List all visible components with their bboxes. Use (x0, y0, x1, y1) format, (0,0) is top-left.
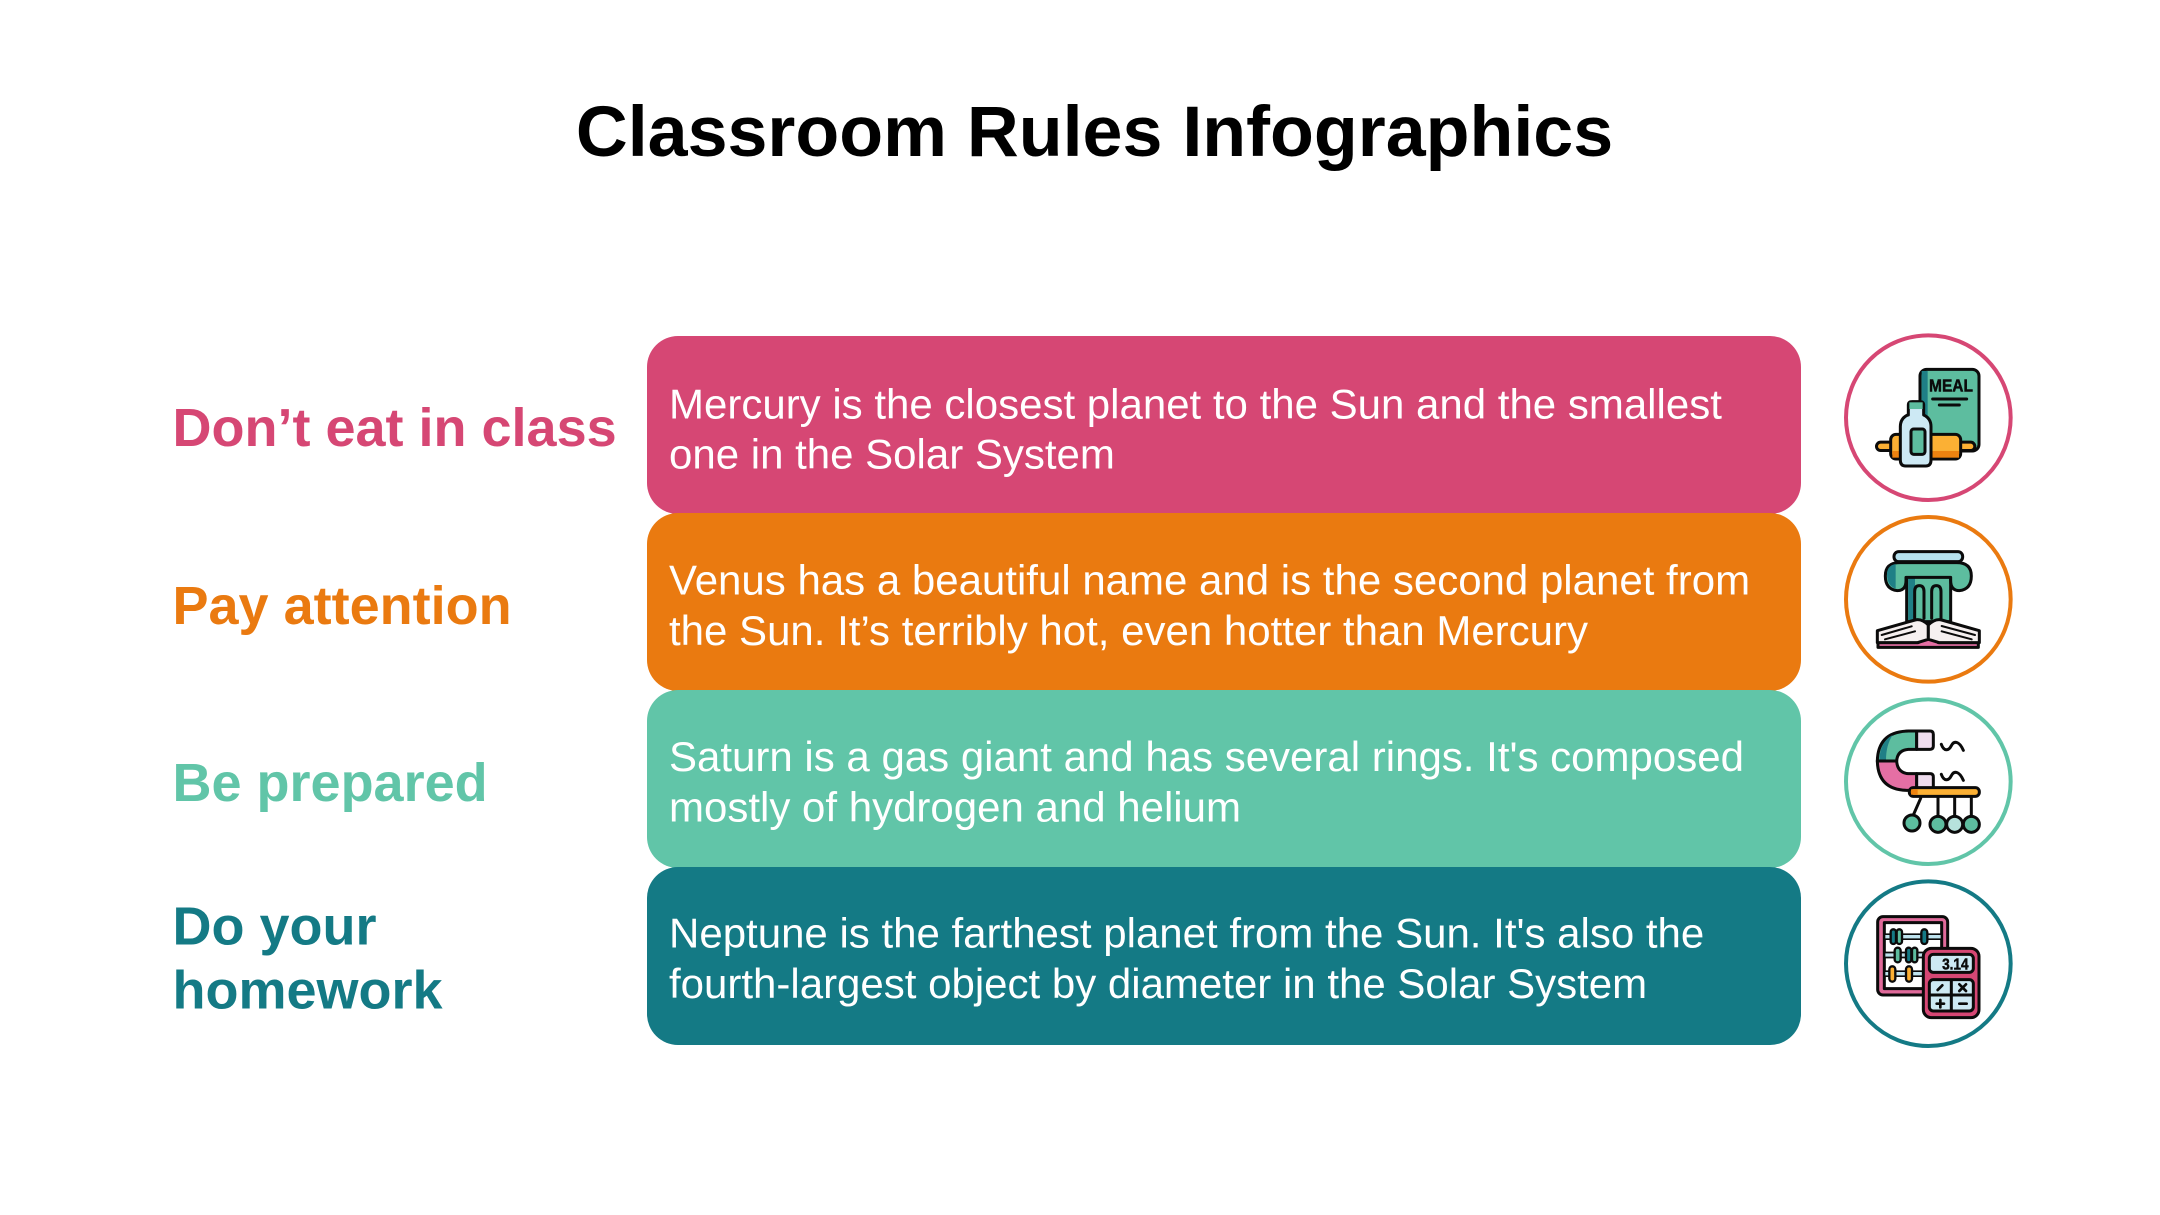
panel: Mercury (647, 336, 1801, 514)
panel: Neptune: Neptune is the farthest planet from the Sun. It's also the (669, 910, 1704, 956)
heading: Be prepared: Be prepared (172, 753, 488, 813)
icon: magnet and pendulums (1846, 699, 2011, 864)
heading: Pay attention: Pay attention (172, 576, 512, 636)
panel: Mercury: one in the Solar System (669, 430, 1115, 478)
panel: Venus: the Sun. It’s terribly hot, even hotter than Mercury (669, 607, 1588, 654)
icon: abacus and calculator (1846, 881, 2011, 1046)
panel: Venus: Venus has a beautiful name and is the second planet from (669, 556, 1750, 604)
row: Don't eat in class (172, 335, 2011, 514)
panel: Saturn (647, 690, 1801, 868)
panel: Saturn: Saturn is a gas giant and has several rings. It's composed (669, 733, 1744, 780)
icon: abacus and calculator: 3.14 (1942, 956, 1969, 974)
row: Do your homework (172, 867, 2011, 1046)
heading: Do your homework: homework (172, 960, 444, 1020)
panel: Saturn: mostly of hydrogen and helium (669, 784, 1241, 830)
title: Classroom Rules Infographics (576, 92, 1613, 172)
heading: Don't eat in class: Don’t eat in class (172, 398, 617, 458)
panel: Venus (647, 513, 1801, 691)
panel: Neptune (647, 867, 1801, 1045)
heading: Do your homework: Do your (172, 896, 377, 956)
icon: meal book, bottle and rolling pin (1846, 335, 2011, 500)
row: Pay attention (172, 513, 2011, 691)
icon: column and open book (1846, 517, 2011, 682)
row: Be prepared (172, 690, 2011, 868)
panel: Neptune: fourth-largest object by diameter in the Solar System (669, 960, 1647, 1007)
panel: Mercury: Mercury is the closest planet to the Sun and the smallest (669, 380, 1722, 428)
icon: meal book, bottle and rolling pin: MEAL (1929, 375, 1973, 396)
